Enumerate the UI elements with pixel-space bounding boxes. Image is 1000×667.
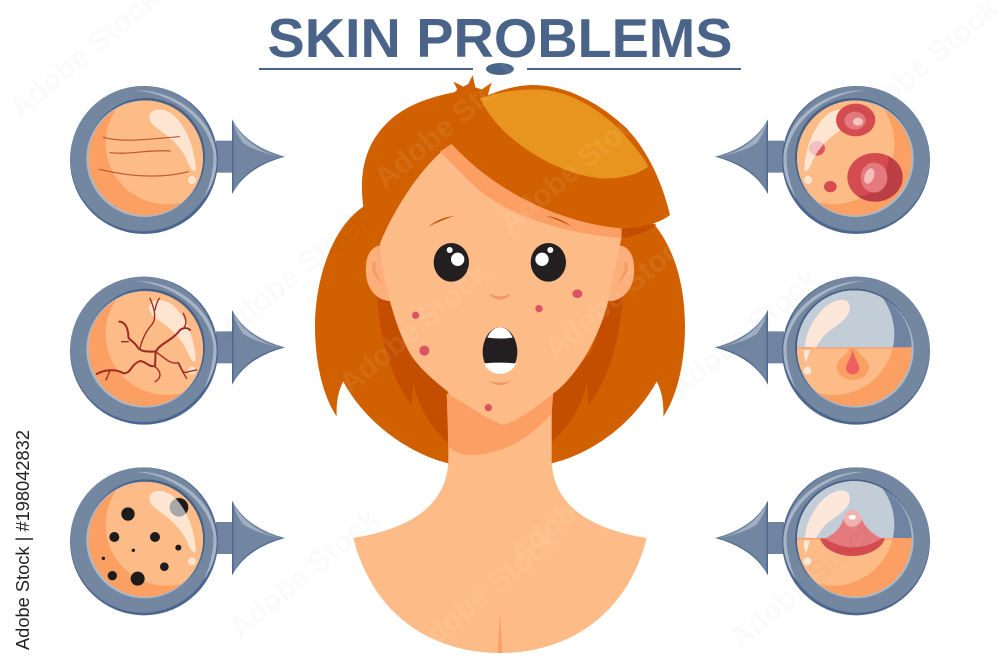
lens: blackheads [70,464,285,615]
left ear [366,245,392,301]
stock watermarks on background: Adobe Stock [663,262,825,405]
lens: skin cross-section with lump [715,464,930,615]
stock watermarks on artwork: Adobe Stock [368,52,530,195]
forehead shadow [440,144,622,238]
air above skin [797,481,912,538]
lens glare [803,300,850,375]
skin surface line [797,538,912,539]
wrinkle lines [99,137,188,176]
stock watermarks on background: Adobe Stock [723,512,885,655]
fringe [452,85,670,228]
right eye [531,243,566,282]
stock watermarks on artwork: Adobe Stock [403,522,565,665]
face pimples [412,289,582,411]
air above skin [797,290,912,348]
hair inner shadow [377,297,623,443]
back hair [315,92,685,463]
hair highlight [480,89,648,178]
portrait: woman with acne [315,75,685,653]
right ear [608,245,634,301]
lens: wrinkles [70,82,285,234]
stock watermarks on artwork [333,52,700,665]
lower lip line [489,381,511,385]
stock watermarks on background: Adobe Stock [223,502,385,645]
cracks [97,298,197,382]
lens glare [803,490,850,565]
hair tuft [452,75,492,98]
skin surface line [797,347,912,349]
open mouth [483,327,517,374]
lump [820,510,885,556]
right eyebrow [546,216,572,227]
stock id: Adobe Stock | #198042832 [13,430,33,650]
black spots [102,498,188,586]
pimples [804,104,903,202]
stock watermarks on artwork: Adobe Stock [333,257,495,400]
stock watermarks on artwork: Adobe Stock [538,222,700,365]
stock watermarks on background: Adobe Stock [213,202,375,345]
face [380,144,622,425]
body and neck [353,370,647,653]
stock watermarks on artwork: Adobe Stock [503,427,665,570]
nose [488,293,512,300]
neck shadow [447,393,553,455]
cleavage line [498,613,502,653]
fringe shadow [622,224,657,238]
follicle [837,348,869,380]
stock watermarks on artwork: Adobe Stock [493,97,655,240]
lens: inflamed pimples [715,82,930,234]
lens: skin cross-section with follicle [715,273,930,425]
left eyebrow [428,216,454,227]
title: SKIN PROBLEMS [268,7,732,69]
lens: cracked skin and veins [70,273,285,425]
title divider [259,63,741,75]
left eye [434,243,469,282]
